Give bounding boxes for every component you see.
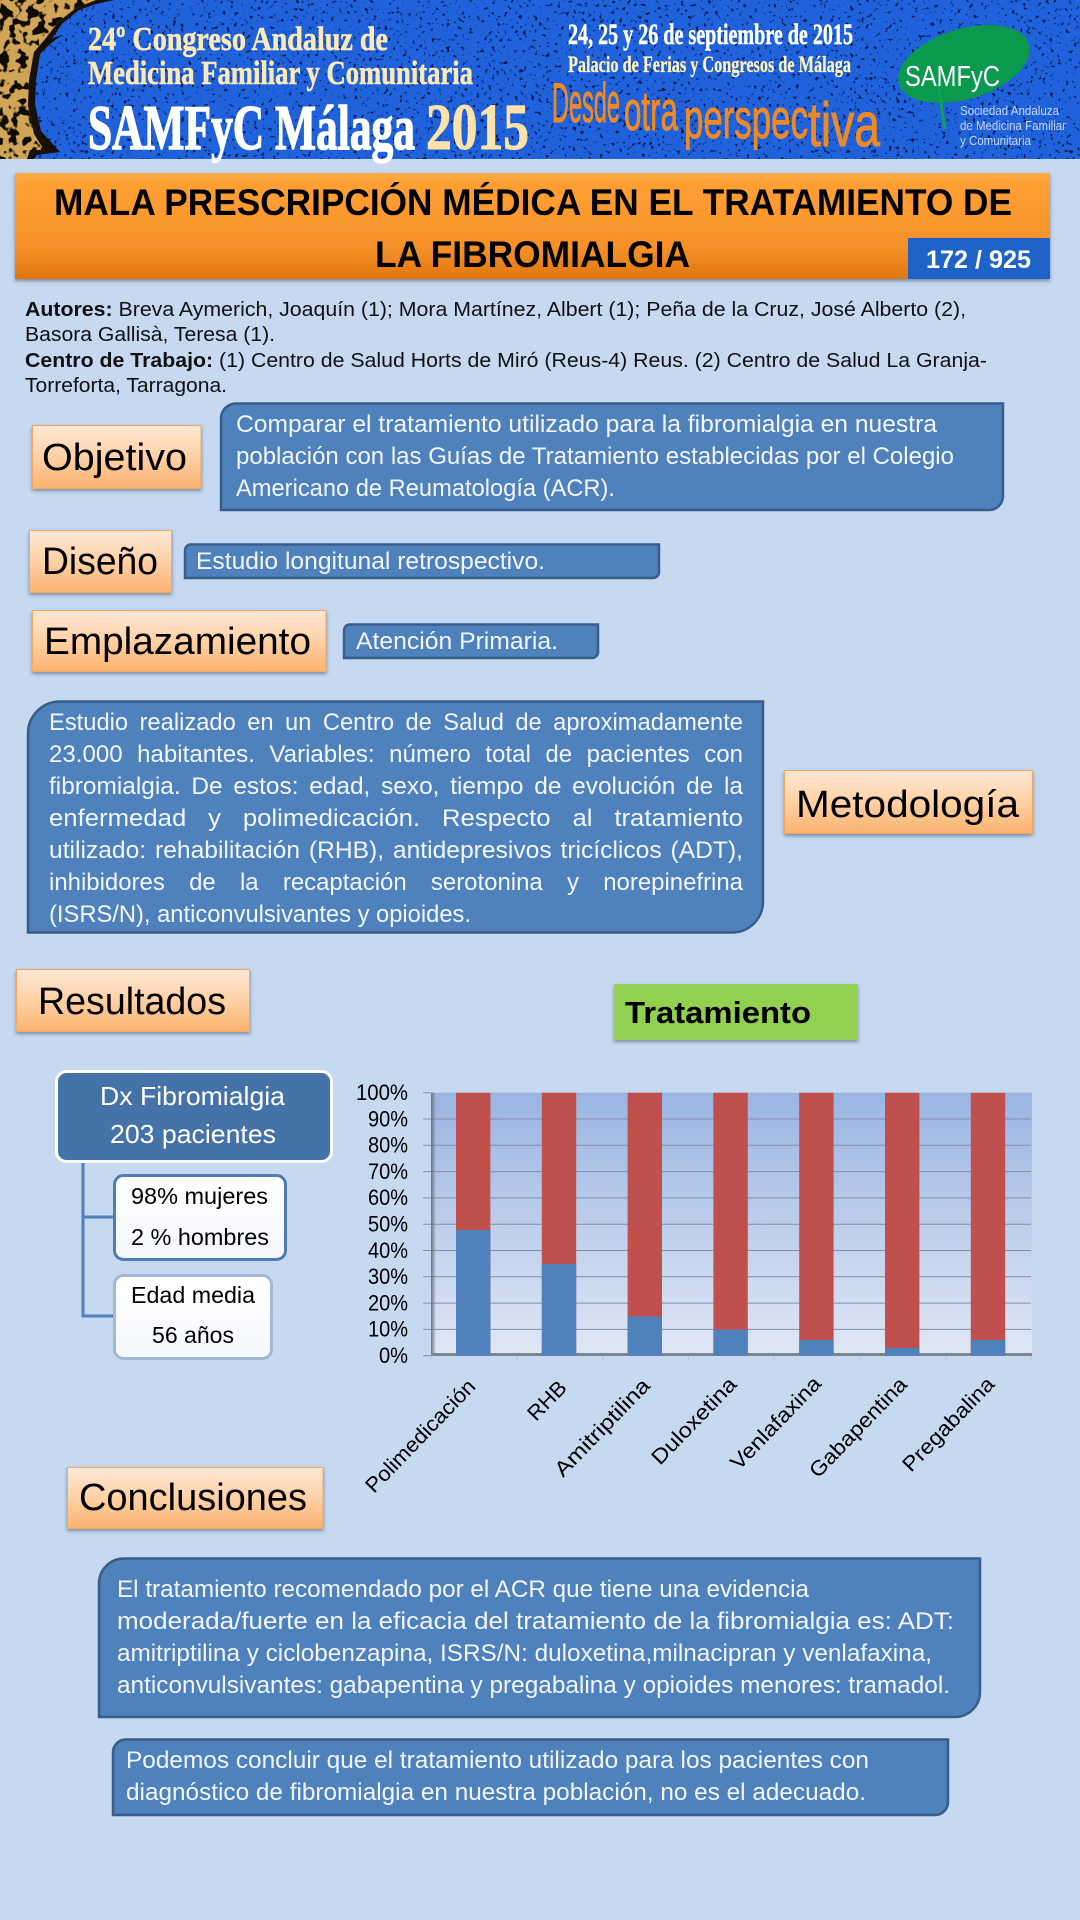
box: sex distribution: 98% mujeres bbox=[131, 1183, 268, 1209]
panel: emplazamiento text bbox=[344, 624, 598, 658]
title text line 2: LA FIBROMIALGIA bbox=[375, 234, 690, 275]
y axis labels: 50% bbox=[368, 1212, 408, 1236]
panel: diseño text: Estudio longitunal retrospectivo. bbox=[196, 548, 545, 575]
box: diagnosis: Dx Fibromialgia bbox=[100, 1081, 286, 1111]
box: mean age: 56 años bbox=[152, 1322, 234, 1348]
label: Tratamiento: Tratamiento bbox=[625, 995, 811, 1030]
box: diagnosis bbox=[56, 1072, 332, 1162]
y axis labels: 20% bbox=[368, 1290, 408, 1315]
event venue: Palacio de Ferias y Congresos de Málaga bbox=[568, 52, 851, 77]
label: Emplazamiento bbox=[32, 610, 326, 672]
SAMFyC logo: y Comunitaria bbox=[960, 133, 1032, 148]
label: Objetivo bbox=[32, 426, 201, 488]
x axis labels: RHB bbox=[523, 1376, 572, 1425]
slogan: perspec bbox=[684, 87, 808, 150]
panel: conclusion 2 bbox=[113, 1740, 948, 1815]
label: Conclusiones bbox=[68, 1468, 323, 1528]
panel: objetivo text: población con las Guías de Tratamiento establecidas por el Colegio bbox=[236, 443, 954, 470]
panel: metodología text: utilizado: rehabilitación (RHB), antidepresivos tricíclicos (ADT), bbox=[49, 837, 743, 864]
panel: conclusion 2: Podemos concluir que el tratamiento utilizado para los pacientes con bbox=[126, 1747, 869, 1774]
y axis labels bbox=[356, 1080, 408, 1368]
box: diagnosis: 203 pacientes bbox=[110, 1119, 276, 1149]
panel: metodología text: inhibidores de la recaptación serotonina y norepinefrina bbox=[49, 869, 743, 896]
x axis labels: Amitriptilina bbox=[550, 1374, 655, 1481]
label: Metodología: Metodología bbox=[796, 784, 1020, 826]
title background bbox=[15, 173, 1050, 279]
x axis labels: Venlafaxina bbox=[726, 1372, 826, 1474]
authors and work centres: Torreforta, Tarragona. bbox=[25, 375, 227, 397]
panel: metodología text: 23.000 habitantes. Variables: número total de pacientes con bbox=[49, 741, 743, 768]
panel: metodología text: Estudio realizado en un Centro de Salud de aproximadamente bbox=[49, 709, 743, 736]
label: Metodología bbox=[784, 770, 1032, 834]
event year: 2015 bbox=[426, 91, 529, 164]
y axis labels: 80% bbox=[368, 1133, 408, 1158]
authors and work centres: Basora Gallisà, Teresa (1). bbox=[25, 324, 275, 346]
box: mean age bbox=[114, 1276, 272, 1358]
panel: conclusion 2: diagnóstico de fibromialgia en nuestra población, no es el adecuado. bbox=[126, 1779, 866, 1806]
event dates: 24, 25 y 26 de septiembre de 2015 bbox=[568, 18, 853, 51]
y axis labels: 60% bbox=[368, 1185, 408, 1210]
label: Diseño bbox=[30, 530, 172, 592]
x axis labels: Duloxetina bbox=[647, 1373, 742, 1469]
panel: objetivo text bbox=[221, 404, 1003, 510]
bars bbox=[456, 1093, 1005, 1356]
plot area bbox=[431, 1093, 1032, 1356]
x axis labels: Polimedicación bbox=[361, 1375, 480, 1497]
panel: conclusion 1: moderada/fuerte en la eficacia del tratamiento de la fibromialgia es: ADT: bbox=[117, 1608, 954, 1635]
label: Resultados bbox=[16, 970, 250, 1032]
authors and work centres bbox=[25, 299, 987, 397]
header banner bbox=[0, 0, 1080, 164]
panel: objetivo text: Comparar el tratamiento utilizado para la fibromialgia en nuestra bbox=[236, 411, 937, 438]
panel: conclusion 1: anticonvulsivantes: gabapentina y pregabalina y opioides menores: tramadol. bbox=[117, 1672, 950, 1699]
panel: conclusion 1: El tratamiento recomendado por el ACR que tiene una evidencia bbox=[117, 1576, 809, 1603]
panel: conclusion 1 bbox=[99, 1558, 980, 1717]
congress name line 2: Medicina Familiar y Comunitaria bbox=[88, 55, 473, 92]
authors and work centres: Centro de Trabajo: (1) Centro de Salud Horts de Miró (Reus-4) Reus. (2) Centro de Salud La Granja- bbox=[25, 350, 987, 372]
connector lines bbox=[83, 1160, 114, 1316]
slogan bbox=[552, 71, 880, 160]
slogan: Desde bbox=[552, 71, 620, 134]
stacked bar chart: treatment bbox=[356, 1080, 1032, 1497]
y axis labels: 10% bbox=[368, 1317, 408, 1342]
x axis labels bbox=[361, 1372, 1000, 1497]
label: Resultados: Resultados bbox=[38, 981, 226, 1023]
panel: diseño text bbox=[185, 544, 659, 578]
panel: emplazamiento text: Atención Primaria. bbox=[356, 628, 558, 655]
poster number badge bbox=[908, 238, 1050, 279]
y axis labels: 70% bbox=[368, 1159, 408, 1184]
box: sex distribution bbox=[114, 1176, 286, 1260]
SAMFyC logo: de Medicina Familiar bbox=[960, 118, 1067, 133]
congress name line 1: 24º Congreso Andaluz de bbox=[88, 21, 388, 58]
label: Diseño: Diseño bbox=[42, 541, 158, 583]
box: sex distribution: 2 % hombres bbox=[131, 1224, 269, 1250]
left wall bbox=[431, 1093, 436, 1356]
SAMFyC logo: Sociedad Andaluza bbox=[960, 103, 1060, 118]
diagram: patient summary bbox=[56, 1072, 332, 1358]
panel: metodología text: enfermedad y polimedicación. Respecto al tratamiento bbox=[49, 805, 743, 832]
y axis labels: 30% bbox=[368, 1264, 408, 1289]
floor bbox=[431, 1353, 1032, 1356]
label: Conclusiones: Conclusiones bbox=[79, 1477, 307, 1519]
panel: metodología text bbox=[28, 702, 763, 932]
SAMFyC logo bbox=[889, 11, 1067, 148]
x axis labels: Gabapentina bbox=[805, 1373, 912, 1482]
label: Tratamiento bbox=[614, 984, 858, 1040]
y axis labels: 100% bbox=[356, 1080, 408, 1105]
panel: metodología text: fibromialgia. De estos: edad, sexo, tiempo de evolución de la bbox=[49, 773, 743, 800]
authors and work centres: Autores: Breva Aymerich, Joaquín (1); Mora Martínez, Albert (1); Peña de la Cruz, José Alberto (2), bbox=[25, 299, 966, 321]
event name: SAMFyC Málaga bbox=[88, 92, 415, 163]
leopard print column bbox=[0, 0, 114, 159]
gridlines bbox=[423, 1093, 1031, 1361]
box: mean age: Edad media bbox=[131, 1282, 255, 1308]
banner speckled background bbox=[0, 0, 1080, 159]
label: Emplazamiento: Emplazamiento bbox=[44, 621, 311, 663]
title panel bbox=[15, 173, 1050, 279]
slogan: otra bbox=[624, 79, 678, 142]
poster number badge: 172 / 925 bbox=[926, 246, 1031, 274]
panel: objetivo text: Americano de Reumatología (ACR). bbox=[236, 475, 615, 502]
SAMFyC logo: SAMFyC bbox=[905, 61, 1000, 93]
label: Objetivo: Objetivo bbox=[42, 437, 187, 479]
x axis labels: Pregabalina bbox=[898, 1372, 1000, 1476]
y axis labels: 40% bbox=[368, 1238, 408, 1263]
panel: conclusion 1: amitriptilina y ciclobenzapina, ISRS/N: duloxetina,milnacipran y venlafaxina, bbox=[117, 1640, 932, 1667]
y axis labels: 0% bbox=[379, 1343, 408, 1368]
y axis labels: 90% bbox=[368, 1106, 408, 1131]
slogan: tiva bbox=[808, 91, 880, 160]
panel: metodología text: (ISRS/N), anticonvulsivantes y opioides. bbox=[49, 901, 471, 928]
title text line 1: MALA PRESCRIPCIÓN MÉDICA EN EL TRATAMIENTO DE bbox=[54, 181, 1012, 223]
